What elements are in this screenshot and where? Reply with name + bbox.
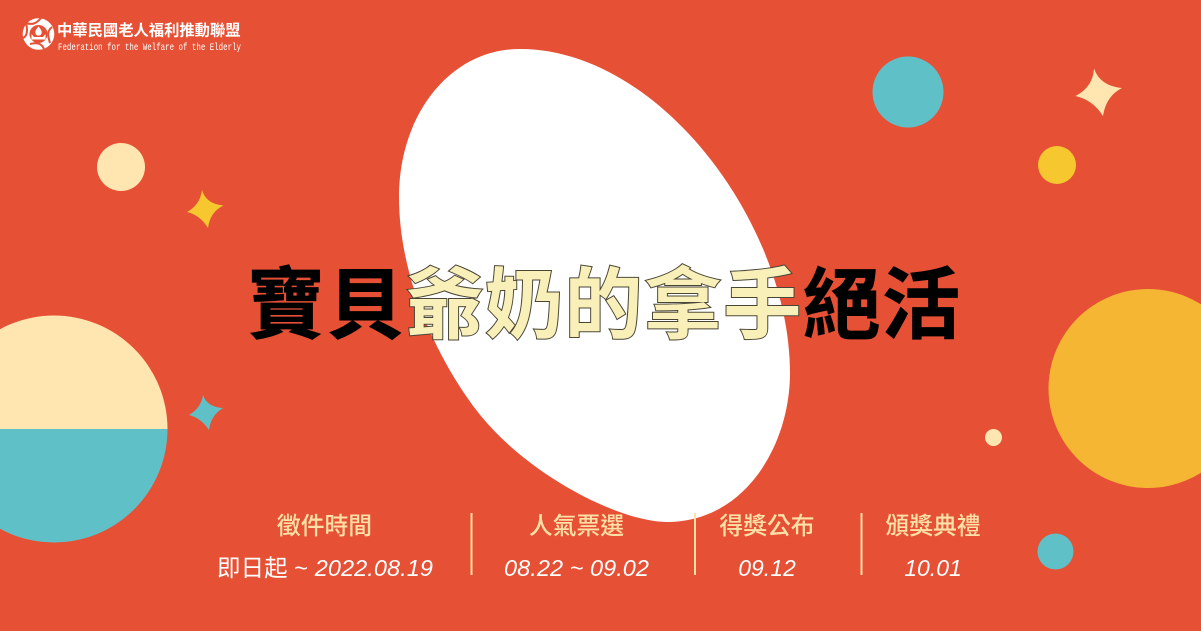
timeline label: awards announced: 得獎公布 (719, 513, 815, 540)
circle: yellow top right (1038, 146, 1076, 184)
logo: chinese name: 中華民國老人福利推動聯盟 (57, 22, 241, 40)
circle: small cream right (985, 429, 1002, 446)
timeline date: award ceremony: 10.01 (904, 555, 962, 581)
divider (860, 513, 862, 575)
circle: cream top left (97, 143, 145, 191)
divider (694, 513, 696, 575)
divider (470, 513, 472, 575)
circle: large orange right (1048, 289, 1201, 488)
icon: teal sparkle (189, 395, 223, 430)
timeline date: popularity vote: 08.22 ~ 09.02 (504, 555, 649, 581)
timeline label: popularity vote: 人氣票選 (529, 513, 624, 540)
circle: teal bottom right (1038, 534, 1074, 570)
timeline date: submission period: 即日起 ~ 2022.08.19 (217, 555, 433, 581)
half-and-half circle left (0, 316, 168, 542)
timeline label: submission period: 徵件時間 (277, 513, 372, 540)
title: 寶貝爺奶的拿手絕活 (247, 261, 960, 349)
icon: yellow sparkle (187, 190, 224, 228)
timeline label: award ceremony: 頒獎典禮 (885, 513, 981, 540)
timeline date: awards announced: 09.12 (738, 555, 796, 581)
icon: cream sparkle (1076, 68, 1122, 116)
logo: english name: Federation for the Welfare of the Elderly (58, 42, 241, 54)
circle: teal top right (872, 56, 944, 128)
logo: federation emblem (23, 18, 54, 50)
white tilted egg shape (399, 49, 790, 522)
